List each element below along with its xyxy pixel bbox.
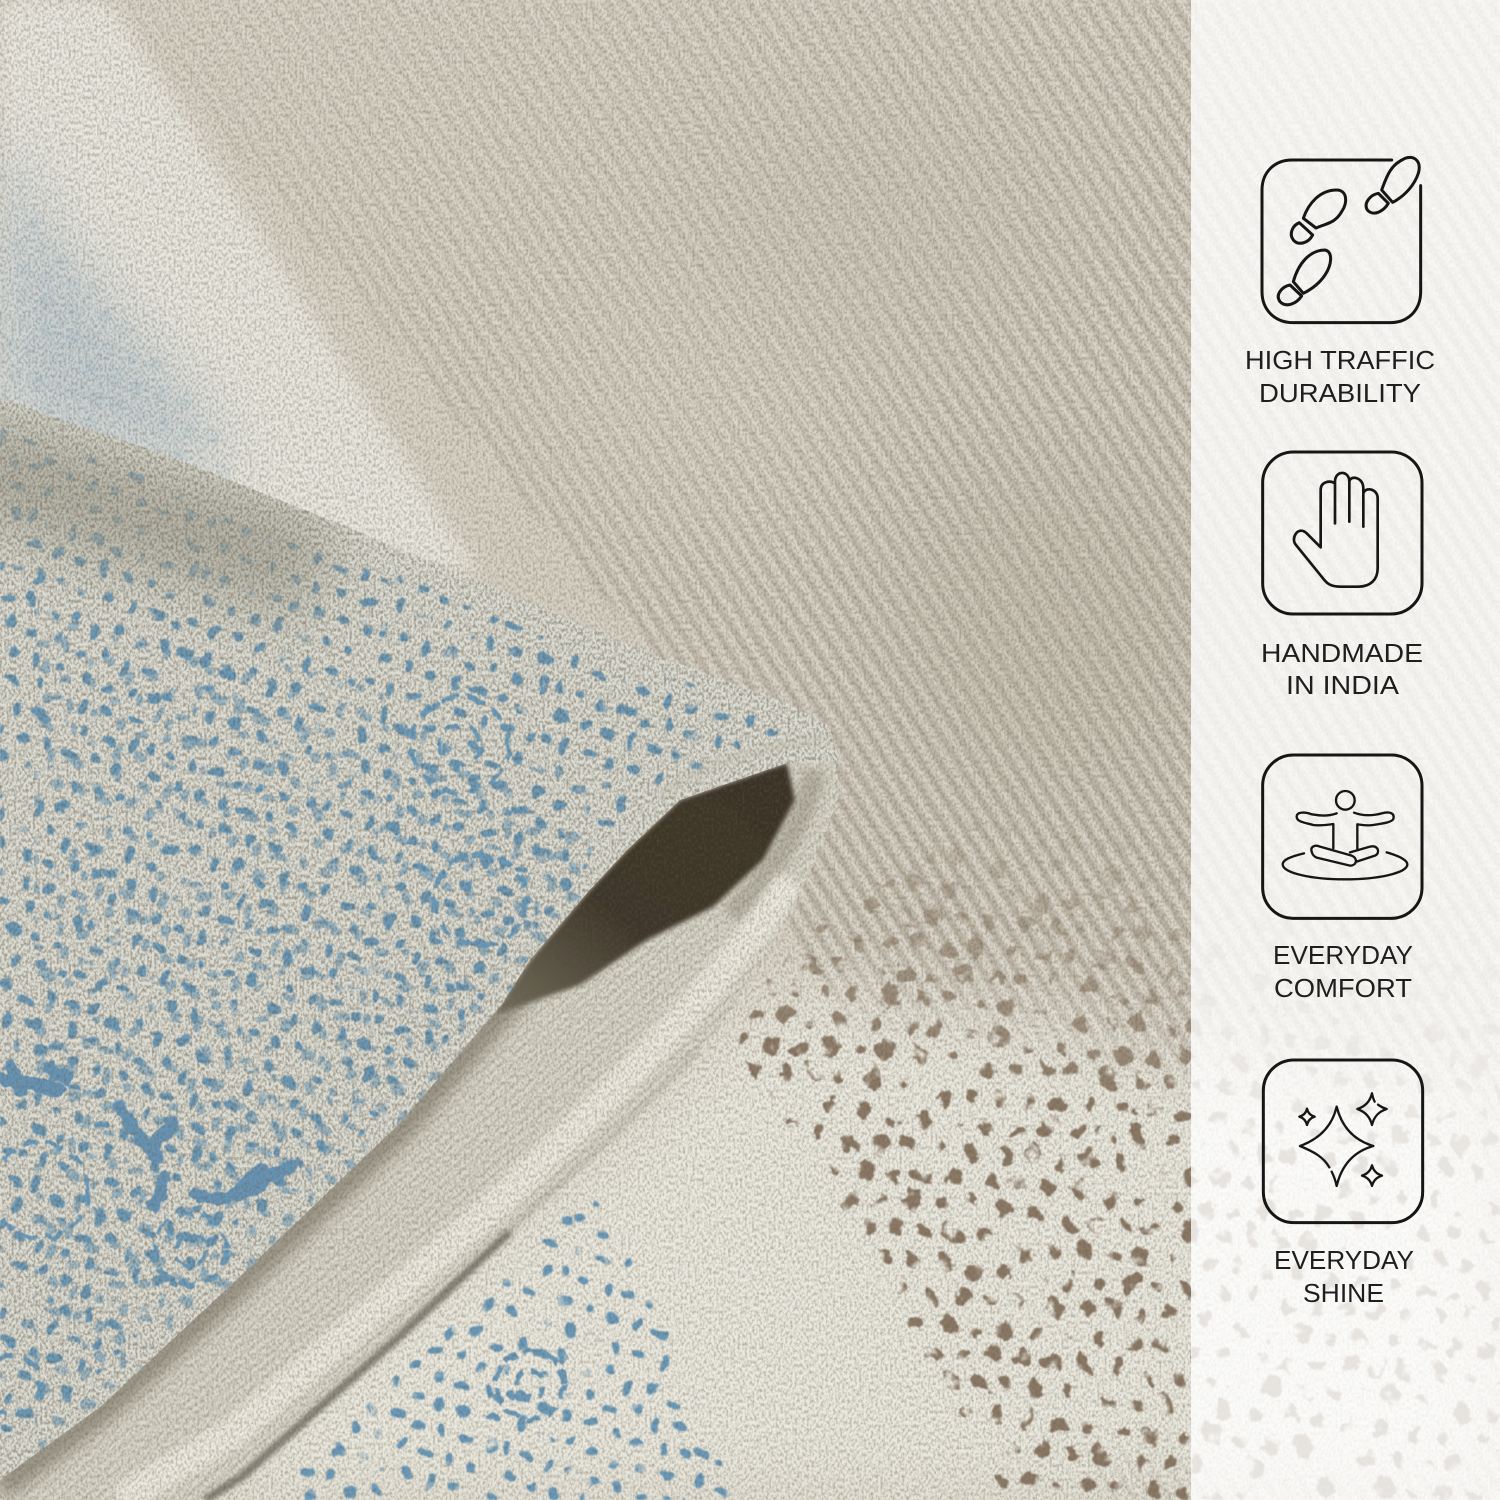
- swirl motifs: [0, 697, 526, 1415]
- feature: handmade in india: [1261, 452, 1423, 700]
- blue haze speckles: [0, 140, 240, 490]
- rolled lip: [660, 738, 828, 795]
- blue printed lower layer: [270, 1190, 735, 1500]
- swirl on lower layer: [496, 1351, 564, 1419]
- icon: hand in a box: [1263, 452, 1422, 614]
- side panel: [1191, 0, 1500, 1500]
- feature: everyday shine: [1263, 1060, 1423, 1308]
- dark inside of fold: [495, 763, 795, 1015]
- icon: meditating figure in a box: [1263, 755, 1422, 918]
- icon: sparkles in a box: [1263, 1060, 1423, 1223]
- label: HIGH TRAFFIC: [1245, 345, 1435, 375]
- crease shadow: [0, 980, 530, 1488]
- blue speckle field, clipped to the roll: [0, 398, 838, 1478]
- rolled rug top layer: [0, 398, 838, 1480]
- label: SHINE: [1303, 1278, 1384, 1308]
- under fold layer: [0, 725, 840, 1500]
- icon: footprints in a box: [1262, 157, 1421, 323]
- soft taupe patches: [540, 100, 1220, 790]
- label: HANDMADE: [1261, 638, 1423, 668]
- label: EVERYDAY: [1274, 1245, 1414, 1275]
- ribbed stripe field: [204, 0, 1191, 1500]
- bold blue print: [0, 1065, 292, 1205]
- woven grain on the roll: [0, 398, 838, 1478]
- pale top-left band: [0, 0, 480, 575]
- cream lower-right band: [150, 980, 1500, 1500]
- label: DURABILITY: [1259, 378, 1421, 408]
- under fold ridge: [120, 880, 790, 1500]
- lip inner shade: [730, 770, 815, 915]
- label: EVERYDAY: [1273, 940, 1413, 970]
- label: COMFORT: [1274, 973, 1412, 1003]
- under fold ribs: [0, 725, 840, 1500]
- grey fade at top of roll: [0, 400, 340, 620]
- feature: everyday comfort: [1263, 755, 1422, 1003]
- label: IN INDIA: [1286, 670, 1400, 700]
- brown speckled stripes: [730, 800, 1500, 1500]
- blue speckles: [0, 430, 790, 1450]
- second speckle layer: [34, 606, 594, 1496]
- outer fold shadow: [205, 1050, 700, 1500]
- feature: high traffic durability: [1245, 157, 1435, 408]
- blue haze top-left: [0, 120, 230, 480]
